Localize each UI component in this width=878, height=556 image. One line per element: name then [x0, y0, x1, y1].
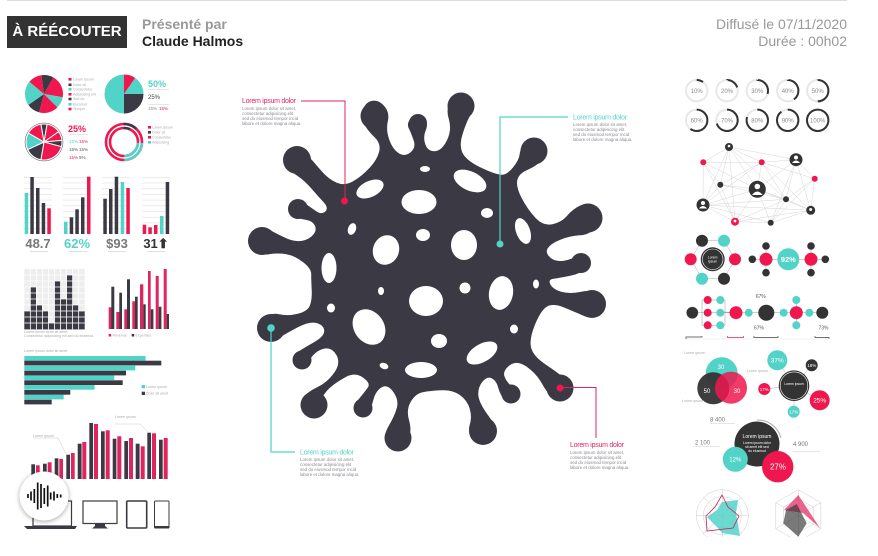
- hexagonal node cluster: Lorem: [708, 256, 718, 260]
- venn diagram: Lorem ipsum: [682, 399, 703, 403]
- donut legend: Adipisicing: [152, 140, 169, 144]
- pie chart 1: Sed do: [73, 97, 84, 101]
- donut legend: Consectetur: [152, 136, 172, 140]
- callout: bottom left: [267, 324, 359, 477]
- callout: top right: labore et dolore magna aliqua.: [573, 137, 632, 142]
- donut chart: [106, 124, 142, 160]
- callout: top left: labore et dolore magna aliqua.: [242, 121, 301, 126]
- pie chart 3: 15%: [69, 139, 78, 144]
- presenter block: Claude Halmos: [142, 33, 243, 49]
- callout: bottom left: Lorem ipsum dolor: [300, 450, 355, 456]
- broadcast date and duration: Durée : 00h02: [758, 33, 847, 49]
- progress rings 10 to 100 percent: [686, 80, 828, 131]
- horizontal bar chart: Lorem ipsum dolor sit amet: [24, 349, 67, 353]
- hexagonal node cluster: [685, 235, 741, 285]
- callout: top right: consectetur adipisicing elit: [573, 127, 625, 132]
- pie chart 1: Consectetur: [73, 88, 93, 92]
- venn diagram: 50: [704, 389, 711, 395]
- pie chart 3: [25, 123, 88, 161]
- progress rings 10 to 100 percent: 30%: [751, 89, 764, 95]
- bubble cluster: 17%: [760, 387, 769, 392]
- progress rings 10 to 100 percent: 80%: [751, 118, 764, 124]
- progress rings 10 to 100 percent: 50%: [812, 89, 824, 95]
- callout: bottom left: Lorem ipsum dolor sit amet,: [300, 457, 354, 462]
- button: À réécouter: À RÉÉCOUTER: [12, 23, 122, 40]
- venn diagram: 30: [734, 389, 741, 395]
- node flow row with brackets: [686, 294, 829, 339]
- big three circle chart: 8 400: [710, 418, 726, 424]
- big three circle chart: [695, 418, 820, 482]
- venn diagram: Lorem ipsum: [747, 369, 768, 373]
- presenter block: Présenté par: [142, 16, 227, 32]
- callout: top right: [496, 114, 632, 248]
- four bar charts with headline numbers: 31⬆: [143, 236, 169, 251]
- four bar charts with headline numbers: $93: [106, 236, 128, 251]
- pie chart 1: Eiusmod: [73, 102, 87, 106]
- callout: bottom left: sed do eiusmod tempor incid: [300, 467, 357, 472]
- broadcast date and duration: [716, 16, 847, 49]
- callout: bottom left: labore et dolore magna aliqua.: [300, 472, 359, 477]
- donut legend: Dolor sit: [152, 130, 165, 134]
- callout: bottom right: [556, 384, 629, 470]
- pie chart 1: [25, 75, 96, 113]
- pie chart 1: Tempor: [73, 107, 86, 111]
- bubble cluster: 17%: [789, 410, 798, 414]
- radar chart: circular: [696, 489, 749, 542]
- column chart with paired bars: [31, 415, 168, 479]
- horizontal bar chart: Dolor sit amet: [146, 392, 168, 396]
- panel: right column charts: [682, 80, 830, 542]
- bubble cluster: 25%: [813, 398, 826, 404]
- pictogram grid chart: Consectetur adipisicing elit sed do eiusmod: [24, 334, 93, 338]
- callout: bottom right: sed do eiusmod tempor incid: [570, 460, 627, 465]
- pictogram grid chart: [24, 269, 93, 338]
- big three circle chart: do eiusmod: [748, 449, 766, 453]
- pie chart 3: 5%: [79, 155, 86, 160]
- bubble cluster: [758, 350, 830, 418]
- progress rings 10 to 100 percent: 100%: [810, 118, 826, 124]
- button: À réécouter: [7, 16, 127, 48]
- central 92 percent node: 92%: [781, 255, 796, 264]
- pie chart 3: 15%: [69, 155, 78, 160]
- progress rings 10 to 100 percent: 70%: [721, 118, 734, 124]
- big three circle chart: Lorem ipsum dolor: [743, 441, 772, 445]
- pie chart 1: Dolor sit: [73, 83, 86, 87]
- pie chart 3: 25%: [68, 124, 86, 134]
- progress rings 10 to 100 percent: 90%: [782, 118, 794, 124]
- network graph: [696, 143, 818, 226]
- callout: top left: [242, 98, 348, 204]
- pie chart 2: 50%: [148, 79, 166, 89]
- node flow row with brackets: 67%: [754, 326, 765, 332]
- big three circle chart: 2 100: [695, 440, 711, 446]
- presenter block: [142, 16, 243, 49]
- four bar charts with headline numbers: [24, 176, 170, 252]
- callout: bottom right: labore et dolore magna aliqua.: [570, 465, 629, 470]
- callout: top right: Lorem ipsum dolor: [573, 114, 628, 122]
- callout: bottom right: Lorem ipsum dolor sit amet,: [570, 450, 624, 455]
- pie chart 2: [104, 74, 169, 114]
- big three circle chart: 4 900: [793, 442, 809, 448]
- progress rings 10 to 100 percent: 10%: [691, 89, 703, 95]
- hexagonal node cluster: ipsum: [708, 260, 717, 264]
- bubble cluster: Lorem ipsum: [784, 382, 804, 386]
- progress rings 10 to 100 percent: 40%: [782, 89, 794, 95]
- pie chart 3: 15%: [79, 147, 88, 152]
- pie chart 3: 15%: [69, 147, 78, 152]
- paired bar chart: Revenue: [112, 334, 127, 338]
- pie chart 3: 15%: [79, 139, 88, 144]
- venn diagram: Lorem ipsum: [684, 351, 705, 355]
- central 92 percent node: [748, 242, 829, 277]
- radar chart: hexagonal: [776, 490, 821, 542]
- top rule: [7, 0, 847, 1]
- paired bar chart: Expenses: [136, 334, 151, 338]
- big three circle chart: Lorem ipsum: [743, 434, 771, 440]
- big three circle chart: 27%: [770, 462, 786, 472]
- progress rings 10 to 100 percent: 20%: [721, 89, 734, 95]
- paired bar chart: [109, 269, 169, 338]
- venn diagram: 30: [718, 365, 725, 371]
- big three circle chart: 12%: [729, 458, 742, 464]
- callout: bottom right: Lorem ipsum dolor: [570, 442, 625, 449]
- pie chart 1: Adipisicing elit: [73, 92, 96, 96]
- callout: top left: consectetur adipisicing elit: [242, 111, 294, 116]
- horizontal bar chart: [24, 349, 168, 404]
- pictogram grid chart: Lorem ipsum dolor sit amet: [24, 330, 67, 334]
- bubble cluster: 18%: [807, 363, 816, 368]
- callout: bottom left: consectetur adipisicing elit: [300, 462, 352, 467]
- pie chart 1: Lorem ipsum: [73, 78, 94, 82]
- callout: top left: Lorem ipsum dolor sit amet,: [242, 106, 296, 111]
- horizontal bar chart: Lorem ipsum: [146, 385, 167, 389]
- bubble cluster: 37%: [771, 358, 784, 364]
- broadcast date and duration: Diffusé le 07/11/2020: [716, 16, 847, 32]
- four bar charts with headline numbers: 48.7: [25, 236, 51, 251]
- panel: left column charts: [24, 74, 173, 529]
- pie chart 2: 25%: [148, 95, 161, 101]
- callout: top right: Lorem ipsum dolor sit amet,: [573, 122, 627, 127]
- donut legend: Lorem ipsum: [152, 126, 173, 130]
- callout: top left: Lorem ipsum dolor: [242, 98, 297, 105]
- progress rings 10 to 100 percent: 60%: [691, 118, 703, 124]
- node flow row with brackets: 67%: [756, 294, 766, 300]
- node flow row with brackets: 73%: [818, 326, 829, 332]
- donut legend: [148, 126, 173, 144]
- callout: top right: sed do eiusmod tempor incid: [573, 132, 630, 137]
- device icons: [24, 501, 169, 529]
- pie chart 2: 15%: [159, 106, 168, 111]
- callout: bottom right: consectetur adipisicing elit: [570, 455, 622, 460]
- pie chart 2: 15%: [148, 106, 157, 111]
- venn diagram: [682, 351, 768, 404]
- icon: audio waveform play badge: [20, 472, 68, 520]
- column chart with paired bars: Lorem ipsum: [33, 434, 54, 438]
- virus illustration: [248, 92, 606, 452]
- four bar charts with headline numbers: 62%: [64, 236, 90, 251]
- callout: top left: sed do eiusmod tempor incid: [242, 116, 299, 121]
- big three circle chart: sit amet elit sed: [745, 445, 769, 449]
- column chart with paired bars: Lorem ipsum: [115, 415, 136, 419]
